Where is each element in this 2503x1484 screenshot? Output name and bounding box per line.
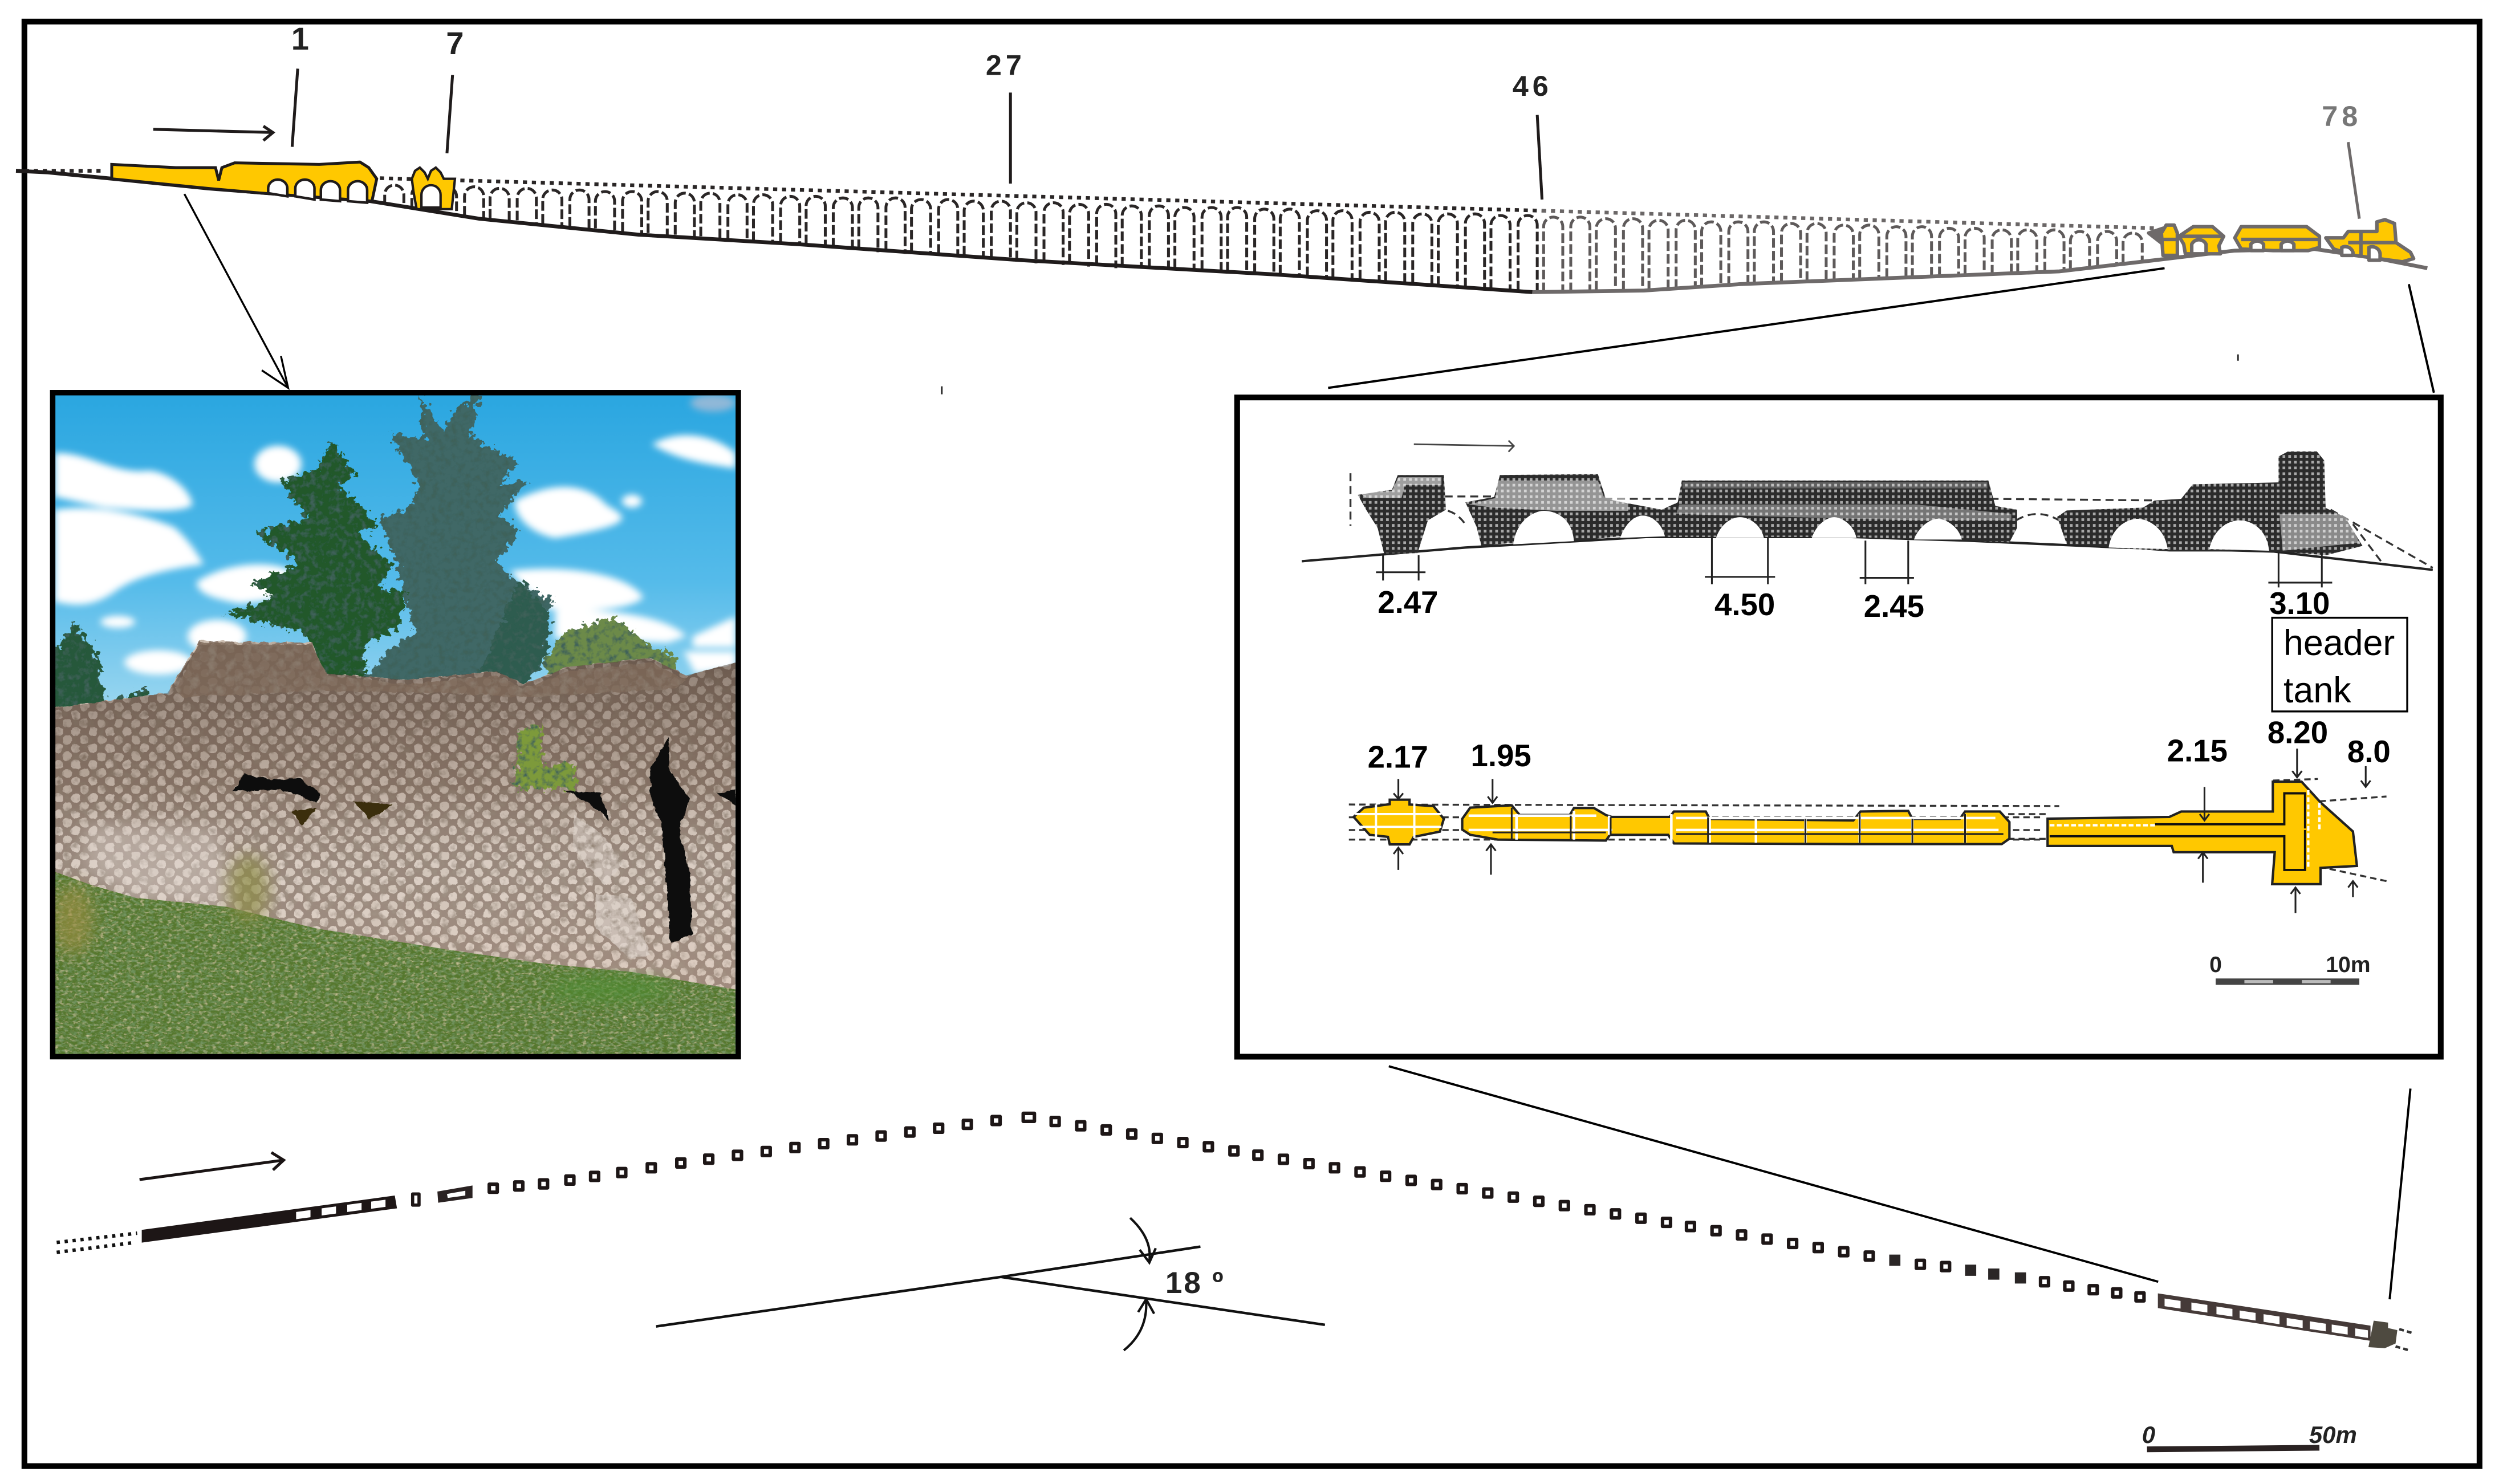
wall before the header tank [2158,1294,2371,1341]
top water-channel dotted line [16,171,1542,211]
dimension 4.50: 4.50 [1714,587,1775,622]
elevation: second block [1465,474,2017,546]
detail scale bar: 0 [2209,953,2222,977]
photograph of the ruined wall [50,392,740,1059]
elevation: header tank block [2057,452,2363,555]
arcade arches, grey section [1543,217,2142,292]
wider isolated pier [437,1185,473,1203]
pier label 27: 27 [986,49,1026,82]
pier label 1: 1 [291,21,309,56]
detail scale bar: 10m [2326,953,2371,977]
pier label 46 [1513,70,1553,200]
distant left trees [55,620,149,707]
descending hollow piers [1051,1117,2144,1301]
yellow surviving section near pier 1 [112,162,377,203]
lime patches on wall [573,815,623,885]
plan width labels: 8.20 [2268,715,2328,750]
plan: yellow header tank [2047,782,2357,884]
apex pier [1023,1113,1034,1121]
18 degree change-of-direction diagram: 18 º [1165,1266,1225,1300]
outflow stubs [2396,1329,2412,1350]
header tank callout: tank [2283,670,2351,710]
dimension 4.50 [1705,537,1775,622]
plan dashed guide lines [1349,779,2387,881]
dimension 3.10: 3.10 [2269,586,2330,621]
yellow surviving sections near header tank [2148,219,2413,262]
pier label 1 [291,21,309,147]
dimension 2.47: 2.47 [1378,585,1438,620]
detail scale bar [2209,953,2371,985]
wall cavities [233,737,736,944]
pier label 46: 46 [1513,70,1553,102]
elevation ground line [1302,537,2433,570]
yellow surviving section at pier 7 [412,168,455,209]
right-hand bush [546,617,677,684]
plan width labels [1368,715,2391,775]
header tank in plan [2368,1321,2398,1348]
aqueduct plan view [56,1113,2412,1350]
leader lines to detail panel [1328,268,2434,1299]
arches of second block [1513,511,1962,544]
dotted wall continuation [56,1233,137,1253]
plan: yellow pier [1354,800,1444,844]
dimension 2.45 [1860,540,1924,624]
photograph border [52,393,738,1056]
small isolated pier [413,1194,419,1205]
stray scan marks [942,355,2238,395]
ground line [16,171,1533,292]
right-hand dark cedar [478,580,551,684]
leader line to photograph [184,194,288,388]
blue-grey cedar tree [357,392,555,689]
plan width labels: 2.17 [1368,740,1428,775]
solid wall start [142,1196,397,1243]
sky [55,395,736,708]
pier label 7 [446,25,464,153]
plan: yellow long wall [1462,806,2009,844]
pier label 78 [2322,100,2362,219]
green cedar tree [226,440,407,680]
elevation: westernmost pier [1358,475,1446,553]
main scale bar: 50m [2309,1421,2357,1448]
flow direction arrow [140,1152,284,1180]
detail panel [1237,397,2441,1056]
dimension 3.10 [2268,551,2332,621]
ruined wall [50,641,740,998]
header tank callout: header [2283,623,2395,663]
plan width labels: 1.95 [1470,738,1531,773]
plan width labels: 2.15 [2167,734,2228,769]
dimension 2.45: 2.45 [1864,589,1924,624]
plan width labels: 8.0 [2347,734,2391,769]
dimension 2.47 [1376,555,1438,620]
pier label 7: 7 [446,25,464,61]
pier label 78: 78 [2322,100,2362,132]
ascending hollow piers [489,1116,1000,1192]
flow direction arrow [153,126,273,140]
elevation dashed reconstruction lines [1351,473,2433,568]
aqueduct elevation profile [16,21,2427,292]
grass [52,855,736,1059]
plan width arrows [1393,749,2371,913]
vine on wall [515,723,578,789]
clouds [55,395,736,674]
small flow arrow [1414,441,1514,452]
arcade arches, dark section [385,185,1537,292]
main scale bar [2142,1421,2357,1449]
18 degree change-of-direction diagram [656,1218,1325,1351]
main scale bar: 0 [2142,1421,2155,1448]
header tank callout [2272,618,2407,711]
filled piers [1889,1255,2026,1283]
